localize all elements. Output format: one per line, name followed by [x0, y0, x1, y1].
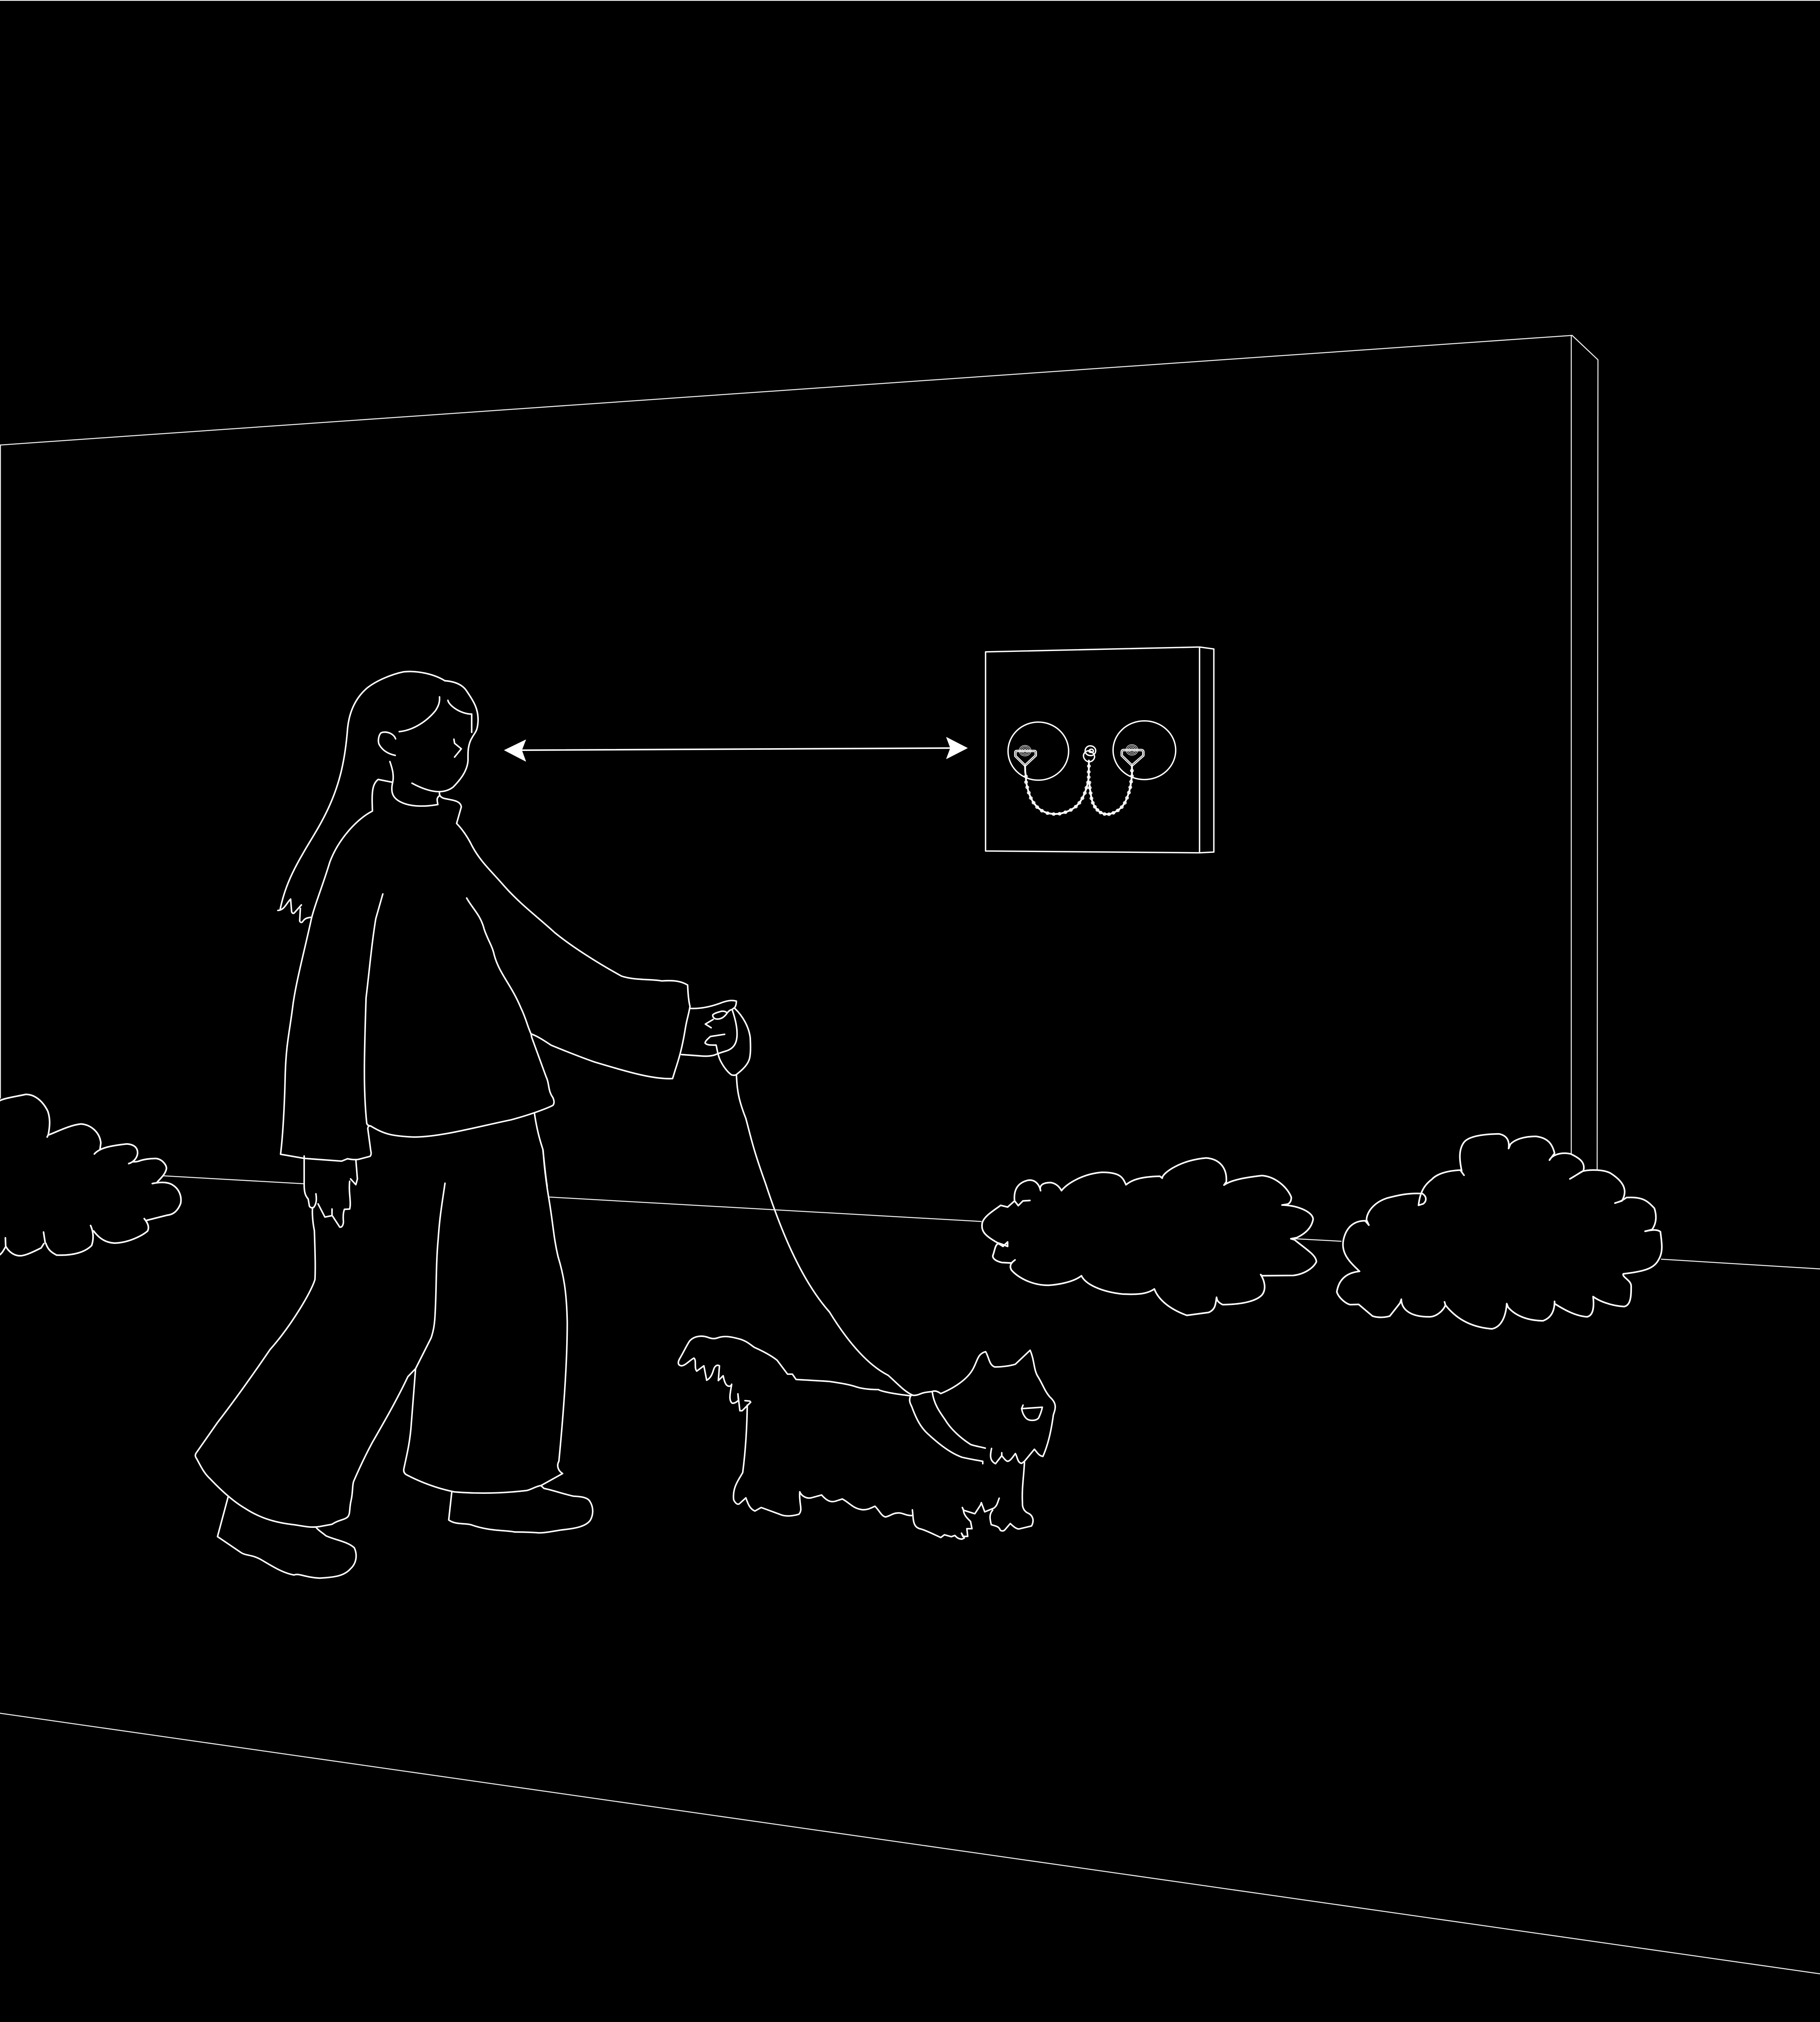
lower hand [304, 1156, 358, 1227]
dog [678, 1336, 1055, 1539]
hand holding leash loop [681, 1000, 751, 1075]
nipple chain jewellery [1015, 745, 1143, 816]
artwork frame [986, 647, 1214, 853]
leash [736, 1076, 912, 1395]
dog near front leg [912, 1498, 999, 1539]
dog far front leg [990, 1462, 1033, 1531]
front trouser top [534, 1113, 547, 1186]
bush: right [1337, 1134, 1662, 1329]
back shoe [218, 1496, 356, 1578]
bush: middle [982, 1158, 1316, 1316]
dog head [912, 1350, 1055, 1464]
face and fringe [379, 681, 478, 792]
neck and collar [390, 761, 440, 806]
artwork circles [1008, 721, 1176, 780]
person: head, hair and upper body [278, 671, 690, 1186]
sweater back [281, 779, 554, 1161]
dog belly and hind leg [733, 1405, 912, 1517]
sight-line double arrow [504, 737, 967, 761]
hair [278, 671, 445, 922]
dog collar [910, 1392, 985, 1464]
sweater arm and sleeve [439, 793, 690, 1079]
front trouser leg and front shoe [404, 1183, 593, 1533]
artwork on the wall [986, 647, 1214, 853]
back trouser leg [195, 1208, 416, 1527]
dog eye [1022, 1405, 1042, 1420]
dog tail and back [678, 1336, 911, 1411]
person: woman walking [195, 671, 751, 1578]
sweater folds [364, 894, 531, 1126]
trousers, hand and shoes [195, 1150, 593, 1578]
bush: left edge [0, 1094, 181, 1256]
